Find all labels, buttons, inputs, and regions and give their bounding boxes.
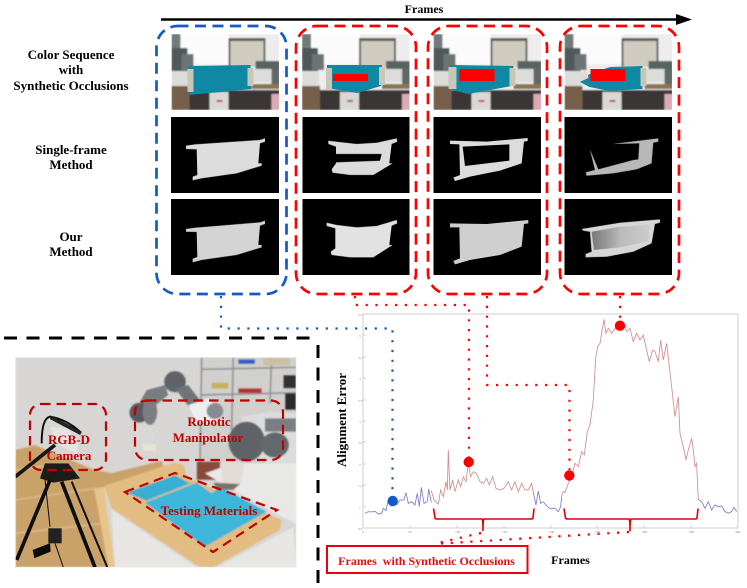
callout box: testing materials [125, 473, 277, 552]
axis label: alignment error: Alignment Error [334, 373, 349, 467]
label: rgb-d camera: RGB-D [48, 432, 90, 447]
label: robotic manipulator: Manipulator [173, 430, 244, 445]
chart: alignment error: 0.5 [358, 527, 363, 531]
dotted connector: red 2 [487, 296, 570, 470]
row label: single-frame method: Method [49, 157, 93, 172]
chart: alignment error: 150 [502, 530, 508, 534]
chart: alignment error: 300 [642, 530, 648, 534]
dotted connector: red 1 [355, 296, 469, 458]
row label: color sequence: Color Sequence [28, 47, 115, 62]
chart: alignment error: 400 [735, 530, 740, 534]
dotted lines to label [434, 532, 629, 544]
chart: alignment error [358, 313, 740, 534]
frames axis title: Frames [405, 2, 444, 16]
highlight box: reference frame (blue) [156, 26, 286, 294]
callout box: rgb-d camera [30, 404, 106, 470]
chart: alignment error: 5 [359, 334, 361, 338]
row label: color sequence: with [59, 62, 84, 77]
color frame 4 with occlusion [564, 34, 672, 110]
bracket: first occlusion range [434, 508, 534, 531]
chart: alignment error: 200 [549, 530, 554, 534]
panel divider: black dashed [4, 338, 318, 588]
chart: alignment error: 4 [359, 377, 361, 381]
label: rgb-d camera: Camera [47, 448, 92, 463]
bracket: second occlusion range [564, 508, 698, 531]
highlight box: occluded frame 1 [296, 26, 416, 294]
callout: frames with synthetic occlusions [327, 546, 528, 573]
chart: alignment error: 3.5 [358, 399, 363, 403]
chart: alignment error: 250 [595, 530, 600, 534]
callout box: robotic manipulator [135, 400, 283, 460]
chart: alignment error: 2 [359, 463, 361, 467]
row label: our method: Method [49, 244, 93, 259]
color frame 1 [172, 34, 280, 110]
callout: frames with synthetic occlusions: Frames with Synthetic Occlusions [338, 554, 515, 568]
photo: experimental setup [15, 357, 297, 567]
row label: single-frame method: Single-frame [35, 142, 107, 157]
chart: alignment error: 0 [362, 530, 364, 534]
row label: color sequence: Synthetic Occlusions [13, 78, 129, 93]
chart: alignment error: 5.5 [358, 313, 363, 317]
marker: red point 3 [615, 320, 625, 331]
dotted connector: red 3 [619, 296, 621, 322]
marker: red point 1 [464, 457, 474, 467]
label: testing materials: Testing Materials [161, 503, 257, 518]
label: robotic manipulator: Robotic [187, 414, 231, 429]
marker: red point 2 [564, 470, 574, 481]
highlight box: occluded frame 2 [428, 26, 547, 294]
chart: alignment error: 100 [455, 530, 460, 534]
color frame 3 with occlusion [434, 34, 542, 110]
marker: blue point [388, 496, 398, 506]
chart: alignment error: 50 [408, 530, 412, 534]
chart: alignment error: 350 [689, 530, 694, 534]
dotted connector: blue [221, 296, 392, 497]
reconstruction shapes [186, 138, 660, 264]
axis label: frames: Frames [551, 553, 590, 567]
chart: alignment error: 2.5 [358, 441, 363, 445]
chart: alignment error: 1.5 [358, 484, 363, 488]
highlight box: occluded frame 3 [560, 26, 679, 294]
color frame 2 with occlusion [302, 34, 410, 110]
frames axis arrow [161, 14, 692, 25]
mask panels [171, 117, 672, 275]
row label: our method: Our [59, 229, 83, 244]
chart: alignment error: 1 [359, 506, 361, 510]
chart: alignment error: 4.5 [358, 356, 363, 360]
chart: alignment error: 3 [359, 420, 361, 424]
